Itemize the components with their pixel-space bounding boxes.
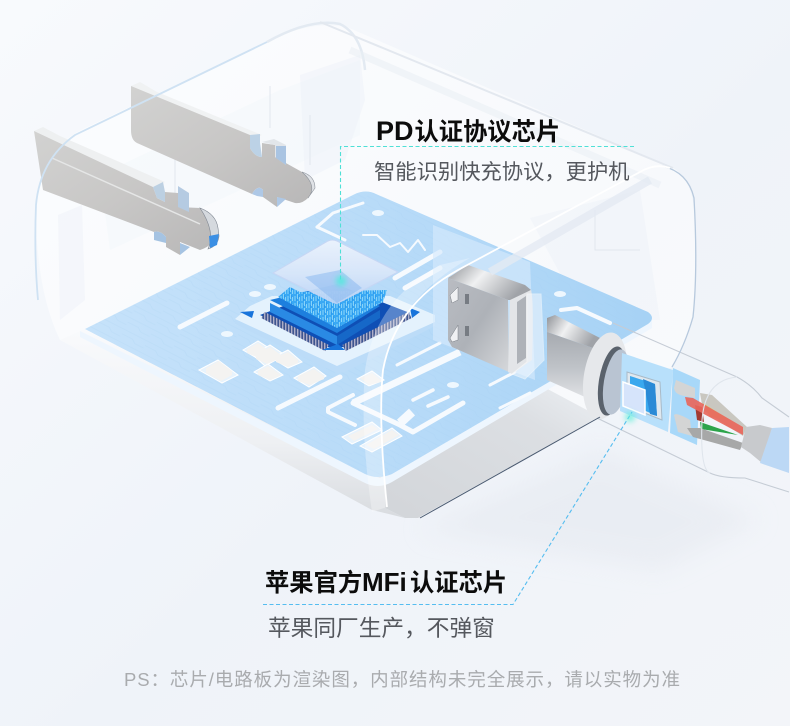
- processor chip: [235, 284, 435, 373]
- heading: PD chip: 认证协议芯片: [414, 119, 560, 146]
- translucent chip cover: [273, 240, 398, 303]
- charger transparent shell outline: [35, 22, 696, 518]
- cable wires: [685, 393, 789, 473]
- heading: MFi chip: 苹果官方: [265, 569, 362, 597]
- clear sheath: [597, 323, 789, 492]
- charger lower body: [60, 329, 600, 518]
- glass sheen over board: [364, 258, 470, 512]
- board traces: [180, 203, 610, 432]
- inner chip board: [620, 353, 700, 445]
- footnote: PS：芯片/电路板为渲染图，内部结构未完全展示，请以实物为准: [124, 669, 680, 690]
- circuit board: [80, 192, 652, 486]
- heading: MFi chip: 认证芯片: [410, 570, 507, 597]
- heading: MFi chip: MFi: [362, 567, 407, 597]
- USB-C port: [433, 225, 544, 380]
- heading: PD chip: PD: [376, 116, 414, 146]
- plug blade: rear: [131, 82, 315, 207]
- description: PD chip: 智能识别快充协议，更护机: [374, 160, 630, 184]
- SMD components: [199, 341, 402, 452]
- description: MFi chip: 苹果同厂生产，不弹窗: [268, 615, 495, 641]
- plug blade: front: [34, 127, 219, 255]
- callout leader: MFi chip: [263, 412, 635, 604]
- cable plug, connector and inner board: [547, 315, 789, 492]
- callout leader: PD chip: [336, 146, 634, 286]
- charger transparent shell back: [36, 25, 695, 518]
